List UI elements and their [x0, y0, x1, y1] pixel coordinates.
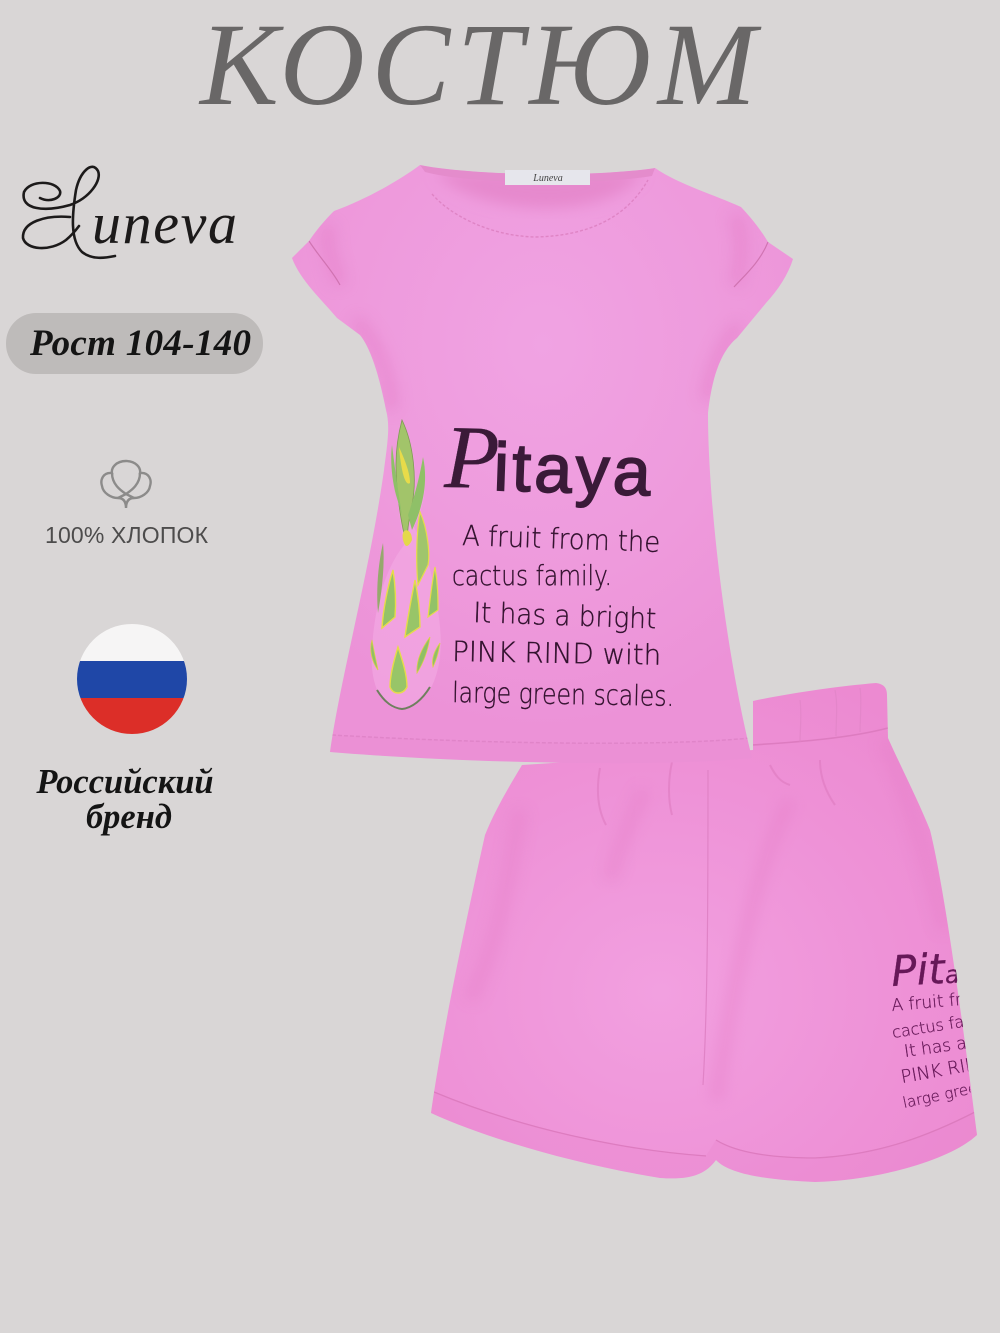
shorts print: PINK RIND: [899, 1051, 994, 1088]
neck label: [505, 170, 590, 185]
shorts print: A fruit from: [891, 988, 989, 1016]
t-shirt print: Pitaya text: cactus family.: [452, 559, 612, 592]
t-shirt print: Pitaya text: PINK RIND with: [452, 635, 661, 672]
shorts print: Pita: [890, 943, 961, 996]
brand origin text: бренд: [86, 798, 172, 836]
shorts print: cactus family: [891, 1007, 999, 1042]
t-shirt: [292, 165, 793, 763]
brand origin text: Российский: [35, 763, 214, 801]
t-shirt print: Pitaya text: large green scales.: [452, 676, 674, 713]
shorts: [431, 683, 1000, 1182]
logo: Luneva: uneva: [92, 191, 237, 256]
icon: Russian flag: [76, 624, 188, 735]
t-shirt print: Pitaya text: P: [443, 408, 500, 508]
size badge: [6, 313, 263, 374]
neck label: Luneva: [532, 173, 563, 184]
t-shirt print: Pitaya text: itaya: [492, 429, 652, 510]
icon: cotton: [101, 461, 151, 508]
t-shirt print: Pitaya text: A fruit from the: [462, 519, 661, 559]
title: КОСТЮМ: [198, 0, 762, 130]
cotton label: 100% ХЛОПОК: [45, 522, 209, 548]
shorts print: [892, 952, 970, 1108]
t-shirt print: Pitaya text: It has a bright: [473, 596, 657, 635]
size badge: Рост 104-140: [29, 323, 251, 364]
t-shirt print: dragon fruit: [371, 420, 441, 709]
logo: Luneva: [23, 167, 237, 258]
t-shirt print: Pitaya text: [443, 408, 674, 713]
